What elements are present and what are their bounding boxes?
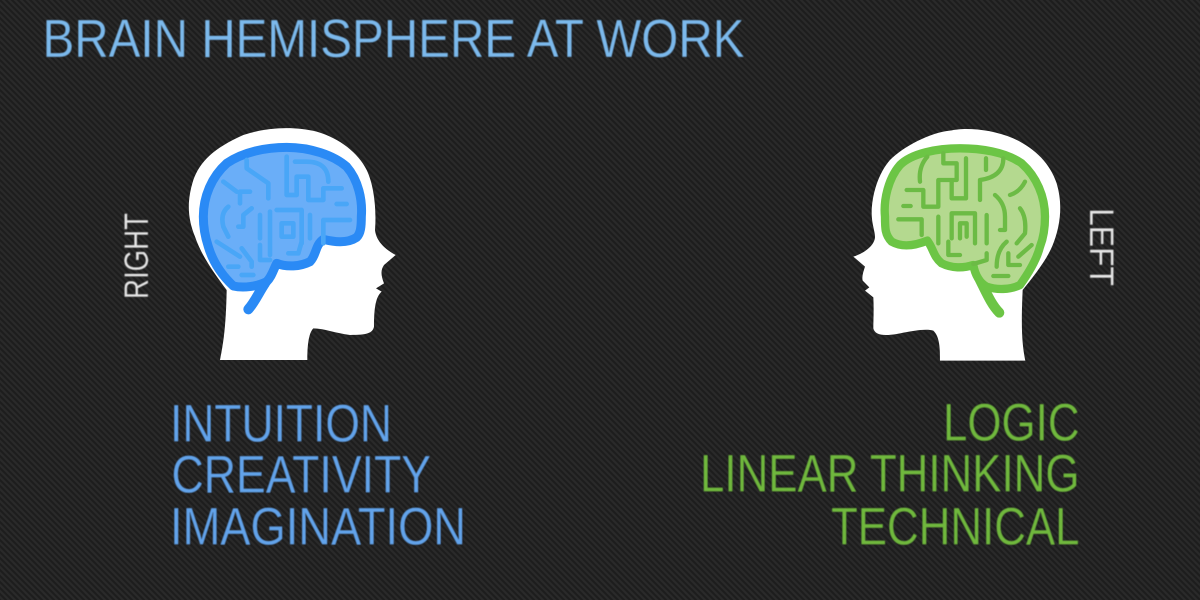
brain maze lines (217, 157, 350, 275)
trait: logic: LOGIC (943, 394, 1080, 452)
brain stem (980, 280, 999, 313)
trait: technical: TECHNICAL (831, 498, 1080, 556)
brain (203, 147, 362, 287)
text: left hemisphere traits (700, 394, 1080, 556)
trait: intuition: INTUITION (170, 394, 392, 454)
label: left: LEFT (1082, 208, 1120, 286)
head silhouette (189, 128, 396, 360)
icon: head with blue brain (189, 128, 396, 360)
brain maze lines (898, 153, 1032, 276)
title: BRAIN HEMISPHERE AT WORK (42, 9, 744, 69)
panel: left hemisphere (700, 129, 1120, 556)
text: right hemisphere traits (170, 394, 466, 556)
icon: head with green brain (853, 129, 1060, 361)
brain stem (248, 283, 265, 309)
trait: linear thinking: LINEAR THINKING (700, 444, 1080, 504)
brain (885, 148, 1045, 289)
trait: creativity: CREATIVITY (172, 446, 431, 504)
trait: imagination: IMAGINATION (170, 498, 466, 556)
panel: right hemisphere (118, 128, 466, 556)
head silhouette (853, 129, 1060, 361)
label: right: RIGHT (118, 213, 156, 299)
